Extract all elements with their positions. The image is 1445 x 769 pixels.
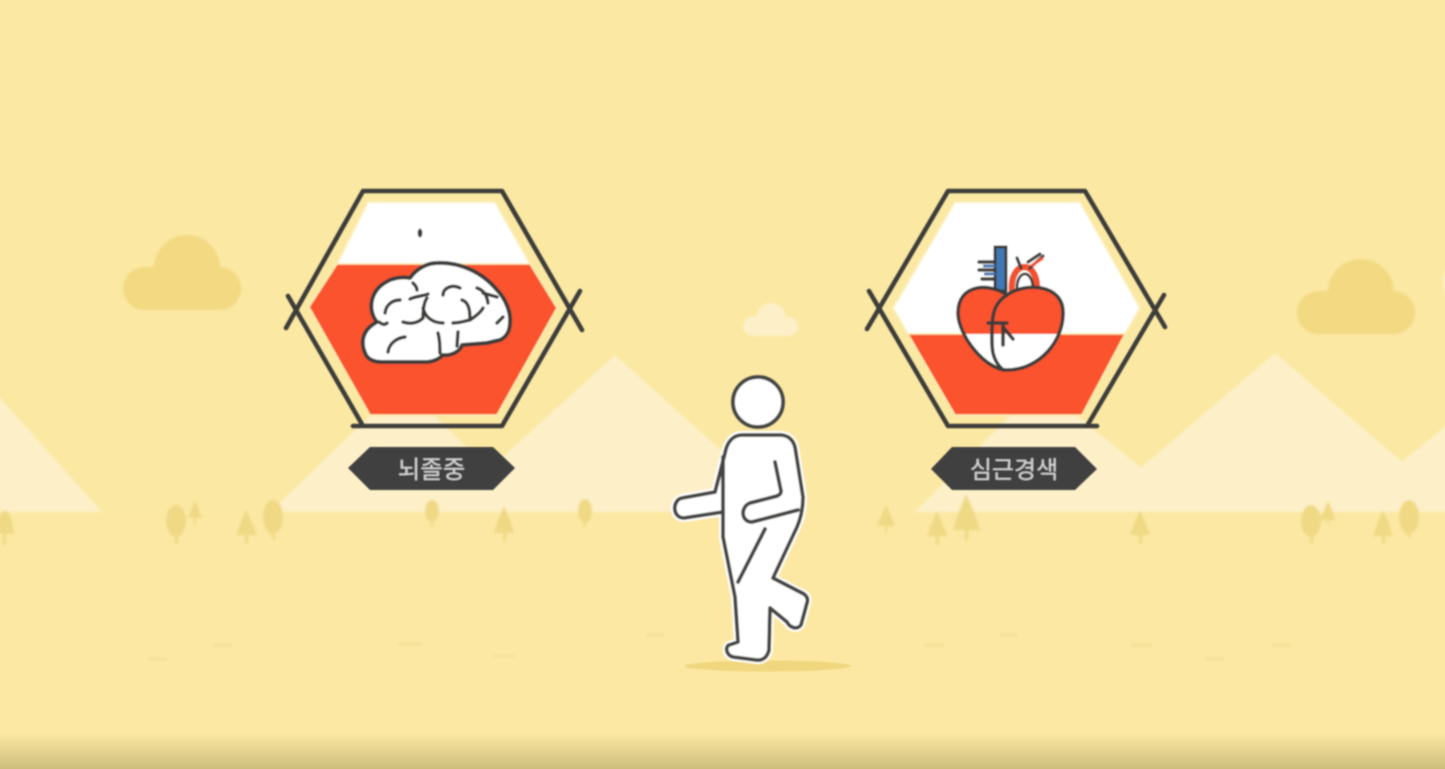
label text: 뇌졸중 xyxy=(398,456,465,484)
hexagon white fill xyxy=(893,202,1140,334)
label: stroke xyxy=(348,447,515,490)
small pale cloud xyxy=(743,303,798,336)
small dark dot xyxy=(418,228,422,238)
label plate xyxy=(348,447,515,490)
cloud left xyxy=(123,235,241,310)
bottom shade band xyxy=(0,733,1445,769)
cloud right xyxy=(1297,259,1415,334)
heart vessels xyxy=(979,247,1043,292)
trees left xyxy=(0,499,592,545)
person body halo xyxy=(675,435,808,660)
ground xyxy=(0,512,1445,769)
hexagon outline with crossed corners xyxy=(867,191,1165,426)
label text: 심근경색 xyxy=(970,457,1058,484)
label plate xyxy=(931,447,1097,490)
person walking xyxy=(675,377,808,660)
person body xyxy=(675,435,808,660)
panel: stroke hexagon xyxy=(286,191,582,426)
heart body upper red xyxy=(958,288,1062,335)
icon: heart xyxy=(958,247,1063,370)
label: myocardial infarction xyxy=(931,447,1097,490)
trees right xyxy=(877,494,1419,545)
person shadow xyxy=(685,660,851,672)
ground dashes xyxy=(148,634,1291,668)
hexagon white fill xyxy=(337,202,530,264)
person arm and leg lines xyxy=(723,457,798,582)
hexagon outline with crossed corners xyxy=(286,191,582,426)
panel: myocardial infarction hexagon xyxy=(867,191,1165,426)
sun at right edge xyxy=(1443,254,1445,310)
hexagon red level xyxy=(908,334,1125,415)
hexagon red level xyxy=(309,264,557,415)
heart outline and arteries xyxy=(958,287,1063,370)
icon: brain xyxy=(363,263,510,362)
person head xyxy=(733,377,783,427)
mountains xyxy=(0,353,1445,512)
background landscape xyxy=(0,235,1445,769)
heart body lower white xyxy=(958,287,1063,370)
